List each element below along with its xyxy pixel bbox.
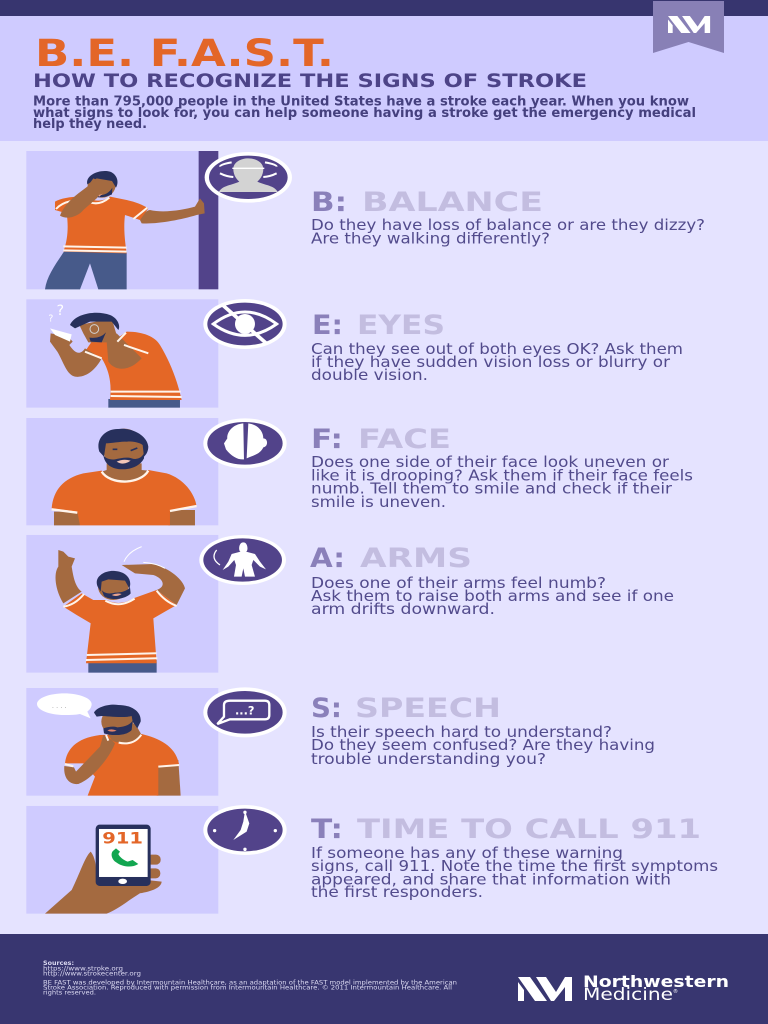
section: A arms text: A:: [310, 543, 345, 574]
title: B.E. F.A.S.T.: [35, 32, 334, 75]
sources text: rights reserved.: [43, 988, 96, 996]
icon: clock: [203, 805, 287, 855]
section: E eyes text: Can they see out of both eyes OK? Ask them: [311, 340, 683, 358]
panel: speech illustration: [26, 688, 218, 796]
icon: balance: [205, 152, 292, 203]
section: E eyes text: EYES: [357, 310, 445, 341]
section: T time text: If someone has any of these warning: [311, 844, 623, 862]
subtitle: HOW TO RECOGNIZE THE SIGNS OF STROKE: [33, 70, 587, 92]
section: F face text: numb. Tell them to smile and check if their: [311, 480, 673, 498]
section: S speech text: Is their speech hard to understand?: [311, 723, 612, 741]
sources text: http://www.strokecenter.org: [43, 970, 141, 978]
section: A arms text: Ask them to raise both arms and see if one: [311, 587, 674, 605]
section: E eyes text: E:: [312, 310, 343, 341]
section: A arms text: ARMS: [360, 543, 472, 574]
section: S speech text: trouble understanding you?: [311, 750, 546, 768]
panel: eyes illustration: ?: [48, 314, 53, 325]
icon: eye crossed: [203, 299, 287, 349]
intro paragraph: [33, 94, 696, 132]
section: T time text: [311, 814, 718, 901]
section: E eyes text: if they have sudden vision loss or blurry or: [311, 353, 671, 371]
intro paragraph: help they need.: [33, 116, 147, 132]
intro paragraph: what signs to look for, you can help someone having a stroke get the emergency medical: [33, 105, 696, 121]
section: B balance text: Are they walking differently?: [311, 230, 550, 248]
panel: call 911 illustration: 911: [102, 828, 143, 847]
sources text: Stroke Association. Reproduced with permission from Intermountain Healthcare. © 2011 Intermountain Healthcare. All: [43, 984, 452, 992]
panel: face illustration: [26, 418, 218, 525]
section: F face text: like it is drooping? Ask them if their face feels: [311, 466, 693, 484]
section: T time text: appeared, and share that information with: [311, 870, 671, 888]
logo ribbon: [653, 1, 724, 53]
Northwestern Medicine logo: Medicine: [583, 985, 673, 1005]
panel: eyes illustration: [26, 299, 218, 408]
sources text: Sources:: [43, 959, 74, 967]
section: S speech text: [311, 693, 655, 768]
panel: balance illustration: [26, 151, 218, 289]
section: T time text: T:: [311, 814, 343, 845]
sources text: [43, 959, 457, 996]
section: T time text: TIME TO CALL 911: [357, 814, 701, 845]
sources text: BE FAST was developed by Intermountain Healthcare, as an adaptation of the FAST model implemented by the American: [43, 978, 457, 986]
section: F face text: Does one side of their face look uneven or: [311, 453, 670, 471]
panel: eyes illustration: ?: [57, 303, 64, 319]
section: F face text: smile is uneven.: [311, 493, 446, 511]
section: S speech text: Do they seem confused? Are they having: [311, 736, 655, 754]
Northwestern Medicine logo: Northwestern: [583, 972, 729, 991]
section: E eyes text: [311, 310, 683, 384]
section: F face text: F:: [311, 424, 343, 455]
icon: split face: [203, 418, 287, 468]
icon: speech bubble: [203, 687, 287, 737]
panel: speech illustration: ....: [52, 701, 68, 710]
panel: call 911 illustration: [26, 806, 218, 914]
Northwestern Medicine logo: [518, 972, 729, 1005]
section: E eyes text: double vision.: [311, 366, 428, 384]
section: A arms text: Does one of their arms feel numb?: [311, 574, 606, 592]
icon: speech bubble: ...?: [235, 703, 254, 717]
panel: arms illustration: [26, 535, 218, 673]
sources text: https://www.stroke.org: [43, 964, 123, 972]
section: S speech text: SPEECH: [355, 693, 501, 724]
section: B balance text: [311, 187, 705, 248]
section: S speech text: S:: [311, 693, 342, 724]
intro paragraph: More than 795,000 people in the United States have a stroke each year. When you know: [33, 94, 689, 110]
footer band: [0, 934, 768, 1024]
Northwestern Medicine logo: ®: [673, 988, 678, 995]
section: B balance text: BALANCE: [362, 187, 543, 218]
section: F face text: FACE: [358, 424, 451, 455]
section: T time text: signs, call 911. Note the time the first symptoms: [311, 857, 718, 875]
icon: body: [199, 535, 286, 585]
header band: [0, 16, 768, 141]
section: T time text: the first responders.: [311, 883, 483, 901]
section: B balance text: B:: [311, 187, 347, 218]
section: A arms text: [310, 543, 674, 618]
section: F face text: [311, 424, 693, 511]
section: A arms text: arm drifts downward.: [311, 600, 495, 618]
section: B balance text: Do they have loss of balance or are they dizzy?: [311, 216, 705, 234]
